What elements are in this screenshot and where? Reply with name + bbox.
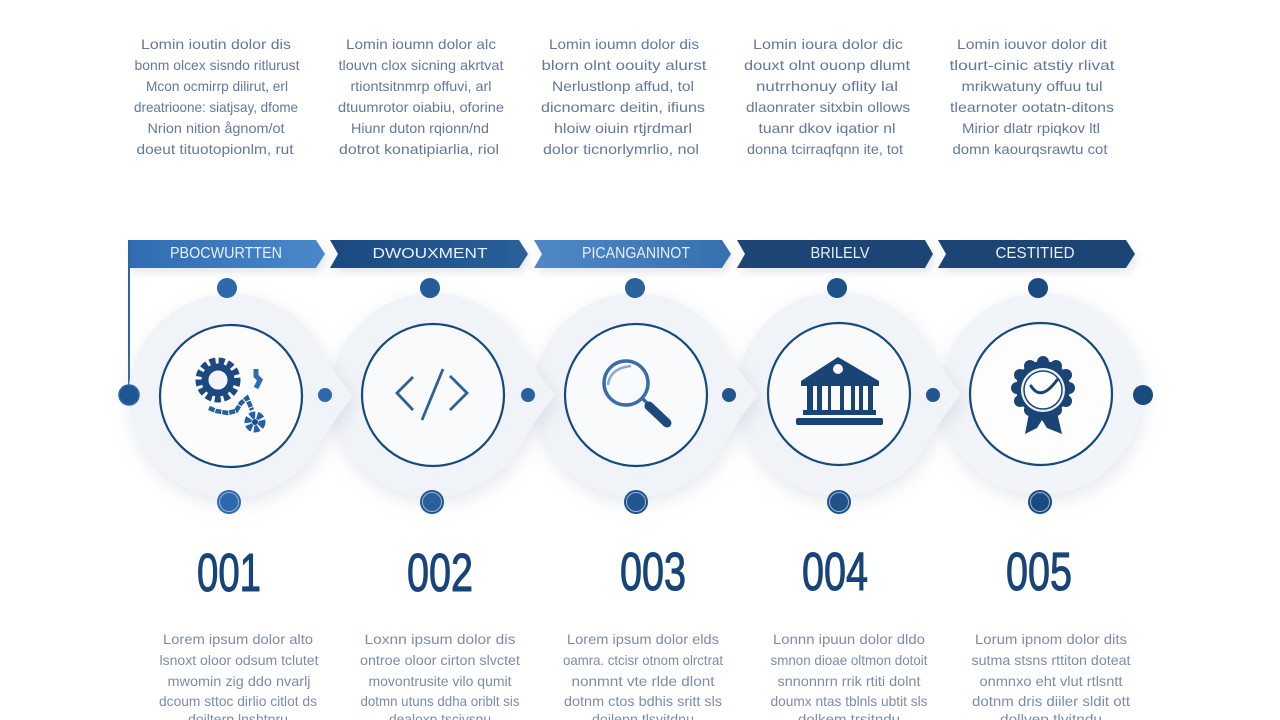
text block: column 3 top <box>541 36 707 157</box>
text block: column 1 bottom <box>159 631 319 720</box>
number 003: 003 <box>620 542 686 602</box>
ribbon 5: label: CESTITIED <box>996 245 1074 262</box>
text block: column 3 bottom: Lorem ipsum dolor elds <box>567 631 719 647</box>
text block: column 2 bottom: dotmn utuns ddha oriblt sis <box>360 693 520 709</box>
text block: column 5 bottom: Lorum ipnom dolor dits <box>975 631 1127 647</box>
text block: column 1 top: bonm olcex sisndo ritlurust <box>134 57 300 73</box>
ribbon 4: label: BRILELV <box>810 245 870 262</box>
text block: column 2 top: Lomin ioumn dolor alc <box>346 36 496 52</box>
ribbon 5: label <box>938 240 1135 268</box>
icon: award rosette <box>1011 356 1075 434</box>
step 5 disc <box>940 293 1142 495</box>
step 3 inner ring <box>565 324 707 466</box>
text block: column 3 top: dicnomarc deitin, ifiuns <box>541 99 705 115</box>
text block: column 2 bottom: ontroe oloor cirton slvctet <box>360 652 520 668</box>
text block: column 2 top: rtiontsitnmrp offuvi, arl <box>350 78 492 94</box>
icon: code brackets <box>397 369 467 420</box>
top nodes <box>217 278 1048 298</box>
text block: column 3 top: hloiw oiuin rtjrdmarl <box>554 120 692 136</box>
text block: column 1 top: Mcon ocmirrp dilirut, erl <box>146 78 288 94</box>
ribbon 2: label: DWOUXMENT <box>372 245 488 262</box>
icon: gears <box>199 361 262 429</box>
bottom text blocks <box>159 631 1131 720</box>
text block: column 5 top: Mirior dlatr rpiqkov ltl <box>962 120 1100 136</box>
text block: column 5 bottom: dotnm dris diiler sldit ott <box>972 693 1130 709</box>
text block: column 5 top <box>950 36 1115 157</box>
text block: column 3 bottom: oamra. ctcisr otnom olrctrat <box>563 652 723 668</box>
step 1 disc <box>129 294 353 498</box>
text block: column 2 top: tlouvn clox sicning akrtvat <box>338 57 504 73</box>
left start node <box>119 385 139 405</box>
ribbon 2: label <box>330 240 528 268</box>
text block: column 5 bottom <box>972 631 1131 720</box>
step circles row <box>129 292 1142 498</box>
text block: column 4 bottom: smnon dioae oltmon dotoit <box>770 652 928 668</box>
text block: column 2 top: Hiunr duton rqionn/nd <box>351 120 489 136</box>
text block: column 4 top: nutrrhonuy oflity lal <box>756 78 898 94</box>
text block: column 4 top: douxt olnt ouonp dlumt <box>744 57 910 73</box>
text block: column 2 bottom: movontrusite vilo qumit <box>368 673 512 689</box>
top text blocks <box>134 36 1115 157</box>
text block: column 4 bottom: doumx ntas tblnls ubtit sls <box>770 693 928 709</box>
ribbon 1: label <box>128 240 325 268</box>
text block: column 2 bottom: Loxnn ipsum dolor dis <box>364 631 516 647</box>
text block: column 3 top: Lomin ioumn dolor dis <box>549 36 699 52</box>
ribbon 3: label: PICANGANINOT <box>582 245 690 262</box>
ribbon 3: label <box>534 240 731 268</box>
text block: column 4 top: tuanr dkov iqatior nl <box>758 120 896 136</box>
text block: column 1 top: Nrion nition ågnom/ot <box>148 120 285 136</box>
step 1 inner ring <box>160 325 302 467</box>
text block: column 4 bottom: Lonnn ipuun dolor dldo <box>773 631 925 647</box>
icon: bank building <box>796 357 883 425</box>
text block: column 1 bottom: Lorem ipsum dolor alto <box>163 631 313 647</box>
ribbon row <box>128 240 1135 268</box>
step 2 disc <box>331 293 555 497</box>
ribbon 4: label <box>737 240 933 268</box>
text block: column 5 bottom: sutma stsns rttiton doteat <box>972 652 1131 668</box>
node dots <box>119 278 1153 514</box>
text block: column 3 bottom <box>563 631 723 720</box>
number 001: 001 <box>197 543 261 603</box>
step 4 inner ring <box>768 323 910 465</box>
step 3 disc <box>534 293 758 497</box>
text block: column 1 top: doeut tituotopionlm, rut <box>136 141 294 157</box>
text block: column 4 top: Lomin ioura dolor dic <box>753 36 903 52</box>
text block: column 2 top: dotrot konatipiarlia, riol <box>339 141 499 157</box>
text block: column 2 top: dtuumrotor oiabiu, oforine <box>338 99 504 115</box>
text block: column 1 top: dreatrioone: siatjsay, dfome <box>134 99 298 115</box>
text block: column 3 bottom: dotnm ctos bdhis sritt sls <box>564 693 722 709</box>
number 005: 005 <box>1006 542 1072 602</box>
text block: column 2 top <box>338 36 504 157</box>
text block: column 1 bottom: lsnoxt oloor odsum tclutet <box>160 652 319 668</box>
text block: column 5 top: tlearnoter ootatn-ditons <box>950 99 1114 115</box>
step 5 inner ring <box>970 323 1112 465</box>
text block: column 4 bottom: snnonnrn rrik rtiti dolnt <box>778 673 921 689</box>
text block: column 5 top: Lomin iouvor dolor dit <box>957 36 1107 52</box>
step numbers <box>197 542 1072 603</box>
text block: column 1 top: Lomin ioutin dolor dis <box>141 36 291 52</box>
number 002: 002 <box>407 543 473 603</box>
side nodes <box>318 385 1153 405</box>
text block: column 4 top: dlaonrater sitxbin ollows <box>746 99 910 115</box>
text block: column 3 bottom: nonmnt vte rlde dlont <box>572 673 715 689</box>
text block: column 3 top: blorn olnt oouity alurst <box>542 57 707 73</box>
text block: column 5 top: tlourt-cinic atstiy rlivat <box>950 57 1115 73</box>
text block: column 5 bottom: onmnxo eht vlut rtlsntt <box>980 673 1123 689</box>
icon: magnifying glass <box>604 361 667 423</box>
text block: column 3 top: Nerlustlonp affud, tol <box>552 78 694 94</box>
step 4 disc <box>737 292 961 496</box>
text block: column 1 bottom: dcoum sttoc dirlio citlot ds <box>159 693 317 709</box>
connector line from ribbon to first node <box>128 240 130 395</box>
bottom nodes <box>217 490 1052 514</box>
number 004: 004 <box>802 542 868 602</box>
text block: column 2 bottom <box>360 631 520 720</box>
step 2 inner ring <box>362 324 504 466</box>
text block: column 1 top <box>134 36 300 157</box>
text block: column 5 top: domn kaourqsrawtu cot <box>952 141 1108 157</box>
text block: column 1 bottom: mwomin zig ddo nvarlj <box>168 673 310 689</box>
text block: column 4 top: donna tcirraqfqnn ite, tot <box>747 141 903 157</box>
text block: column 4 top <box>744 36 910 157</box>
text block: column 4 bottom <box>770 631 928 720</box>
ribbon 1: label: PBOCWURTTEN <box>170 245 282 262</box>
text block: column 3 top: dolor ticnorlymrlio, nol <box>543 141 699 157</box>
text block: column 5 top: mrikwatuny offuu tul <box>962 78 1102 94</box>
